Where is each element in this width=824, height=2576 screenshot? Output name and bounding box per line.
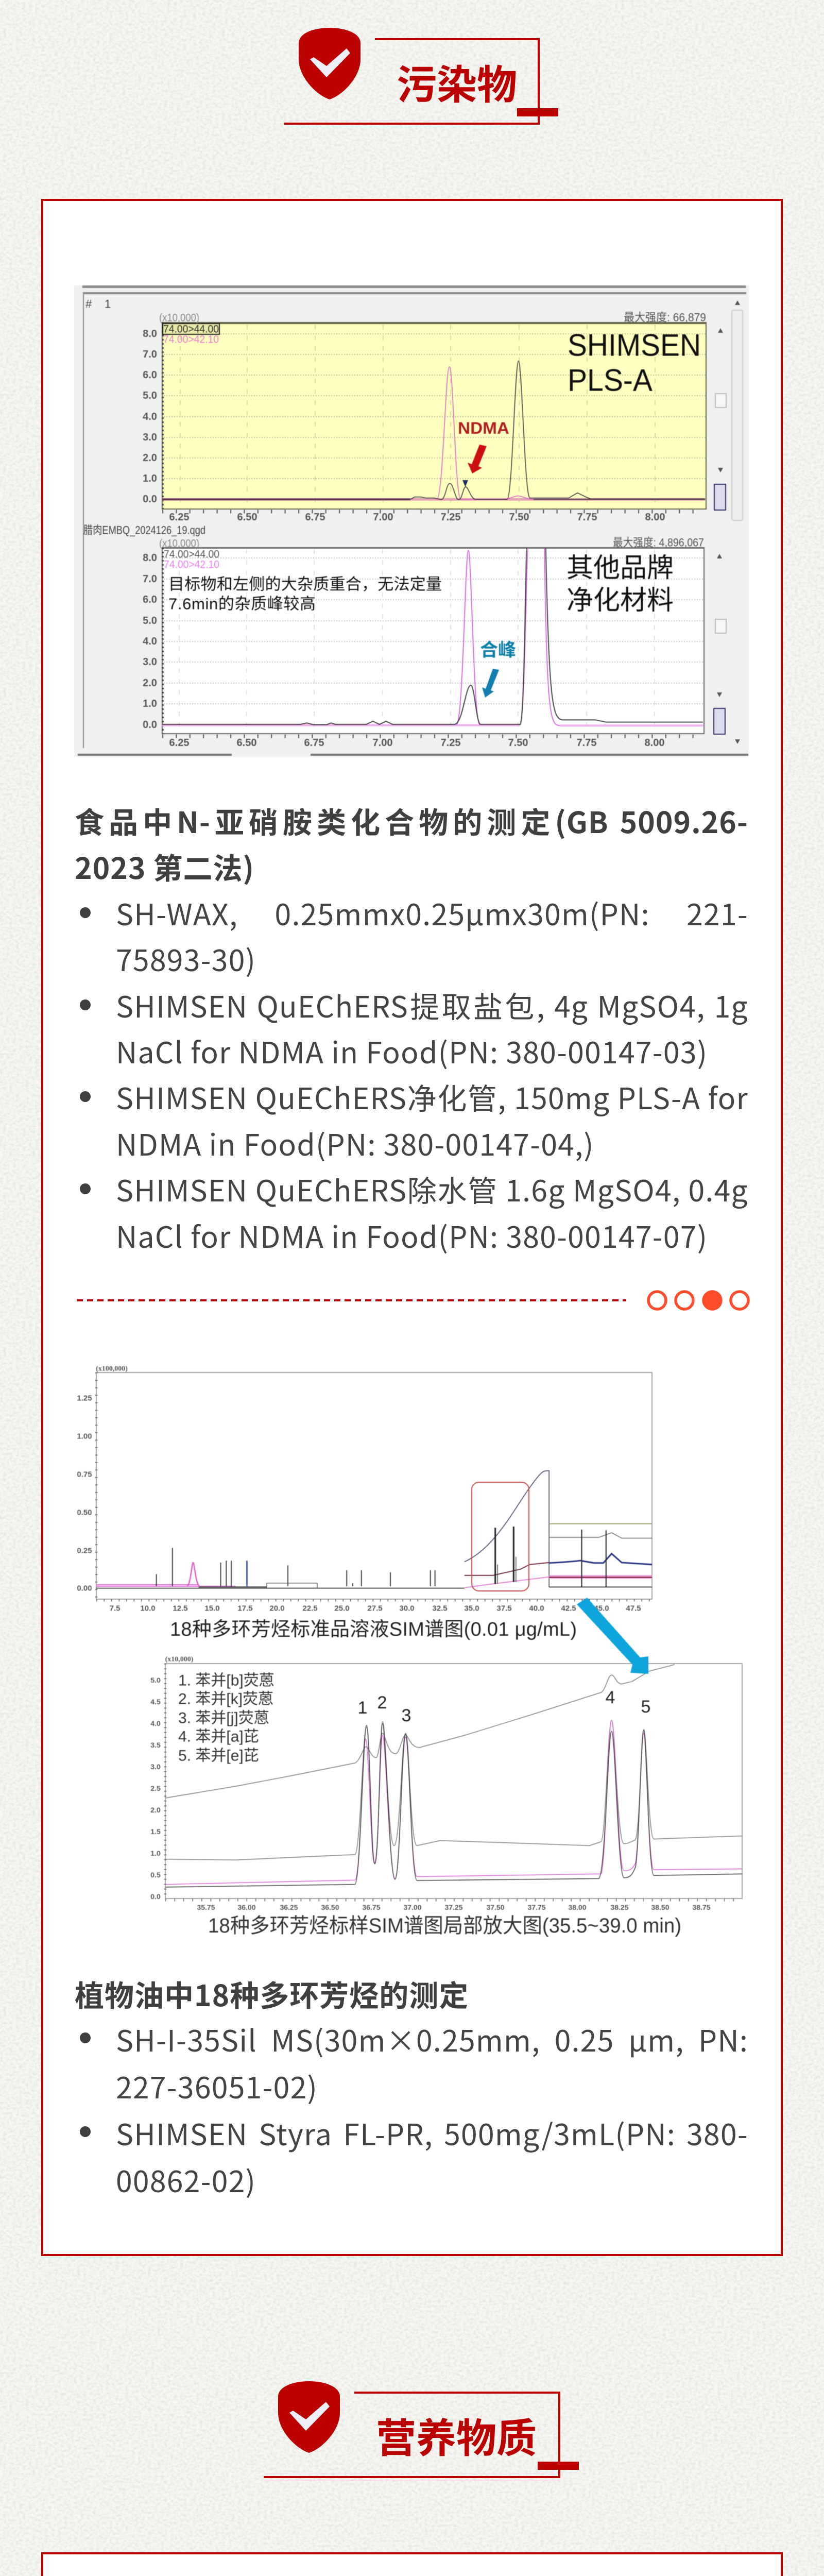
axis labels: 40.0 (529, 1604, 544, 1613)
legend: compounds: 1. 苯并[b]荧蒽 (178, 1672, 274, 1689)
plot: SHIMSEN PLS-A: 74.00>42.10 (163, 334, 219, 345)
plot: other brand (162, 547, 704, 736)
y and x axis labels, plot 2: 7.25 (441, 737, 460, 749)
axis labels: 1.5 (150, 1827, 161, 1836)
y and x axis labels, plot 1: 4.0 (143, 411, 157, 422)
axis labels: 38.25 (610, 1903, 629, 1911)
axis labels: 36.75 (362, 1903, 381, 1911)
callout: 合峰 (480, 640, 516, 698)
axis labels: 15.0 (204, 1604, 220, 1613)
highlight box (472, 1482, 529, 1591)
y and x axis labels, plot 2: 8.0 (143, 552, 157, 564)
axis labels: (x100,000) (96, 1365, 128, 1372)
axis labels: 4.0 (150, 1719, 161, 1727)
axis labels: 0.0 (150, 1892, 161, 1901)
y and x axis labels, plot 2 (143, 536, 704, 749)
legend: compounds: 3. 苯并[j]荧蒽 (178, 1709, 269, 1727)
peak numbers: 1 (358, 1698, 367, 1718)
heading text: 营养物质 (376, 2406, 537, 2464)
header frame (264, 2392, 579, 2478)
y and x axis labels, plot 1 (83, 311, 706, 537)
axis labels: 38.75 (692, 1903, 711, 1911)
callout: NDMA: NDMA (458, 419, 509, 437)
plot: other brand: 目标物和左侧的大杂质重合，无法定量 (168, 575, 442, 594)
plot: SHIMSEN PLS-A: 74.00>44.00 (163, 324, 219, 335)
axis labels: 0.50 (77, 1509, 92, 1517)
axis labels: 38.00 (568, 1903, 587, 1911)
axis labels: 1.00 (77, 1432, 92, 1440)
heading: N-nitrosamine determination: 食品中N-亚硝胺类化合物的测定(GB 5009.26- (75, 800, 748, 842)
y and x axis labels, plot 1: 7.75 (577, 512, 597, 523)
panel: contaminants (41, 199, 783, 2256)
heading: PAHs in vegetable oil: 植物油中18种多环芳烃的测定 (75, 1973, 469, 2015)
y and x axis labels, plot 1: 6.25 (169, 512, 189, 523)
y and x axis labels, plot 1: 7.0 (143, 349, 157, 360)
y and x axis labels, plot 2: 7.50 (508, 737, 528, 749)
arrow: zoom link (577, 1598, 648, 1674)
caption: zoomed SIM: 18种多环芳烃标样SIM谱图局部放大图(35.5~39.0 min) (208, 1914, 681, 1937)
y and x axis labels, plot 2: 6.50 (237, 737, 256, 749)
peak numbers: 2 (377, 1693, 387, 1713)
bullet: Styra FL-PR (80, 2112, 748, 2201)
axis labels: 37.50 (486, 1903, 505, 1911)
legend: compounds: 2. 苯并[k]荧蒽 (178, 1691, 273, 1707)
axis labels: 0.5 (150, 1871, 161, 1879)
section header: 污染物 (284, 28, 558, 125)
y and x axis labels, plot 2: 6.75 (304, 737, 324, 749)
scrollbars (714, 300, 743, 744)
y and x axis labels, plot 1: 8.00 (645, 512, 665, 523)
axis labels: 1.25 (77, 1394, 92, 1402)
y and x axis labels, plot 1: 0.0 (143, 494, 157, 505)
axis labels: 1.0 (150, 1849, 161, 1857)
axis labels: 47.5 (626, 1604, 641, 1613)
y and x axis labels, plot 1: 5.0 (143, 390, 157, 401)
axis labels: 2.0 (150, 1806, 161, 1814)
axis labels: 2.5 (150, 1784, 161, 1792)
bullet: cleanup tube (80, 1076, 748, 1164)
y and x axis labels, plot 2: 1.0 (143, 698, 157, 709)
y and x axis labels, plot 2: 7.00 (373, 737, 392, 749)
bullet: SH-WAX column: SH-WAX, 0.25mmx0.25μmx30m(PN: 221- (116, 892, 748, 934)
bullet: SH-WAX column (80, 892, 748, 980)
axis labels: 36.50 (321, 1903, 339, 1911)
axis labels: 38.50 (651, 1903, 670, 1911)
peak numbers: 5 (641, 1697, 650, 1717)
y and x axis labels, plot 1: 7.25 (441, 512, 460, 523)
axis labels: 27.5 (367, 1604, 383, 1613)
axis labels: 42.5 (561, 1604, 576, 1613)
peak numbers (358, 1688, 650, 1725)
heading text: 污染物 (397, 53, 517, 111)
bullet: SH-I-35Sil MS: SH-I-35Sil MS(30m×0.25mm, 0.25 μm, PN: (116, 2018, 748, 2060)
charts: 18 PAH SIM chromatograms (77, 1365, 743, 1937)
axis labels: 0.00 (77, 1584, 92, 1593)
y and x axis labels, plot 1: 最大强度: 66,879 (624, 311, 706, 324)
axis labels: 35.75 (197, 1903, 215, 1911)
axis labels: 25.0 (334, 1604, 350, 1613)
y and x axis labels, plot 2: (x10,000) (159, 538, 199, 549)
y and x axis labels, plot 1: (x10,000) (159, 312, 199, 324)
axis labels: 5.0 (150, 1676, 161, 1684)
axis labels: 22.5 (302, 1604, 318, 1613)
axis labels: 35.0 (464, 1604, 479, 1613)
axis labels: 32.5 (432, 1604, 448, 1613)
plot: other brand: 74.00>44.00 (164, 548, 219, 561)
y and x axis labels, plot 2: 8.00 (645, 737, 664, 749)
axis labels: 17.5 (237, 1604, 253, 1613)
axis labels: 0.25 (77, 1547, 92, 1555)
legend: compounds (178, 1672, 274, 1764)
axis labels: 37.25 (444, 1903, 463, 1911)
y and x axis labels, plot 2: 4.0 (143, 636, 157, 647)
caption: standard solution SIM: 18种多环芳烃标准品溶液SIM谱图(0.01 μg/mL) (170, 1619, 577, 1640)
y and x axis labels, plot 1: 8.0 (143, 328, 157, 340)
bullet: Styra FL-PR: 00862-02) (116, 2159, 256, 2201)
bullet: cleanup tube: SHIMSEN QuEChERS净化管, 150mg PLS-A for (116, 1076, 748, 1118)
bullet: extraction salt pack: NaCl for NDMA in Food(PN: 380-00147-03) (116, 1030, 708, 1072)
panel: nutrients (41, 2552, 783, 2576)
axis labels (77, 1365, 641, 1613)
y and x axis labels, plot 1: 3.0 (143, 432, 157, 443)
y and x axis labels, plot 1: 1.0 (143, 473, 157, 484)
axis labels: (x10,000) (165, 1656, 194, 1663)
y and x axis labels, plot 1: 2.0 (143, 452, 157, 464)
chart: NDMA chromatogram comparison screenshot (74, 285, 749, 757)
peak numbers: 4 (606, 1688, 615, 1707)
axis labels: 37.75 (527, 1903, 546, 1911)
y and x axis labels, plot 1: 7.50 (509, 512, 529, 523)
axis labels: 4.5 (150, 1698, 161, 1706)
bullet: SH-I-35Sil MS: 227-36051-02) (116, 2065, 318, 2107)
y and x axis labels, plot 2: 5.0 (143, 615, 157, 626)
heading: N-nitrosamine determination: 2023 第二法) (75, 845, 254, 888)
callout: NDMA (458, 419, 509, 473)
divider with step dots (77, 1290, 750, 1311)
bullet: SH-I-35Sil MS (80, 2018, 748, 2107)
bullet: dewatering tube: SHIMSEN QuEChERS除水管 1.6g MgSO4, 0.4g (116, 1168, 748, 1210)
plot: SHIMSEN PLS-A: SHIMSEN (568, 328, 701, 363)
axis labels: 12.5 (173, 1604, 188, 1613)
axis labels: 37.5 (496, 1604, 512, 1613)
chart: zoomed SIM chromatogram 35.5–39 min (150, 1656, 742, 1911)
bullet: Styra FL-PR: SHIMSEN Styra FL-PR, 500mg/3mL(PN: 380- (116, 2112, 748, 2154)
heading: N-nitrosamine determination (75, 800, 748, 888)
axis labels (150, 1656, 711, 1911)
bullet: dewatering tube: NaCl for NDMA in Food(PN: 380-00147-07) (116, 1214, 708, 1257)
legend: compounds: 5. 苯并[e]芘 (178, 1748, 259, 1764)
y and x axis labels, plot 2: 3.0 (143, 656, 157, 668)
icon: red shield with check (278, 2381, 340, 2453)
y and x axis labels, plot 2: 最大强度: 4,896,067 (613, 536, 704, 549)
axis labels: 37.00 (403, 1903, 422, 1911)
axis labels: 36.25 (280, 1903, 298, 1911)
y and x axis labels, plot 2: 7.0 (143, 573, 157, 585)
axis labels: 10.0 (140, 1604, 156, 1613)
icon: red shield with check (299, 28, 360, 99)
axis labels: 45.0 (594, 1604, 609, 1613)
y and x axis labels, plot 2: 6.25 (169, 737, 189, 749)
legend: compounds: 4. 苯并[a]芘 (178, 1728, 259, 1745)
y and x axis labels, plot 2: 7.75 (577, 737, 596, 749)
axis labels: 3.0 (150, 1762, 161, 1771)
y and x axis labels, plot 1: 7.00 (373, 512, 393, 523)
bullet: extraction salt pack (80, 984, 748, 1072)
y and x axis labels, plot 1: 6.0 (143, 369, 157, 381)
axis labels: 36.00 (237, 1903, 256, 1911)
bullet: dewatering tube (80, 1168, 748, 1257)
axis labels: 20.0 (269, 1604, 285, 1613)
header frame (284, 38, 558, 125)
plot: other brand: 净化材料 (566, 586, 674, 616)
bullet: extraction salt pack: SHIMSEN QuEChERS提取盐包, 4g MgSO4, 1g (116, 984, 748, 1026)
bullet: cleanup tube: NDMA in Food(PN: 380-00147-04,) (116, 1122, 594, 1164)
plot: other brand: 7.6min的杂质峰较高 (168, 595, 316, 613)
y and x axis labels, plot 1: 腊肉EMBQ_2024126_19.qgd (83, 523, 205, 537)
peak numbers: 3 (402, 1706, 411, 1725)
section header: 营养物质 (264, 2381, 579, 2478)
axis labels: 30.0 (399, 1604, 415, 1613)
y and x axis labels, plot 2: 6.0 (143, 594, 157, 605)
bullet: SH-WAX column: 75893-30) (116, 938, 256, 980)
axis labels: 3.5 (150, 1741, 161, 1749)
chart: full SIM chromatogram (77, 1365, 652, 1613)
y and x axis labels, plot 2: 0.0 (143, 719, 157, 731)
plot: SHIMSEN PLS-A (162, 322, 706, 512)
plot: SHIMSEN PLS-A: PLS-A (568, 363, 653, 398)
callout: 合峰: 合峰 (480, 640, 516, 660)
y and x axis labels, plot 1: 6.75 (305, 512, 325, 523)
chart: NDMA chromatogram comparison screenshot: 1 (105, 298, 111, 310)
y and x axis labels, plot 2: 2.0 (143, 677, 157, 689)
axis labels: 7.5 (110, 1604, 120, 1613)
y and x axis labels, plot 1: 6.50 (237, 512, 257, 523)
plot: other brand: 74.00>42.10 (164, 558, 219, 571)
axis labels: 0.75 (77, 1470, 92, 1479)
chart: NDMA chromatogram comparison screenshot: # (85, 298, 92, 310)
plot: other brand: 其他品牌 (566, 553, 674, 583)
